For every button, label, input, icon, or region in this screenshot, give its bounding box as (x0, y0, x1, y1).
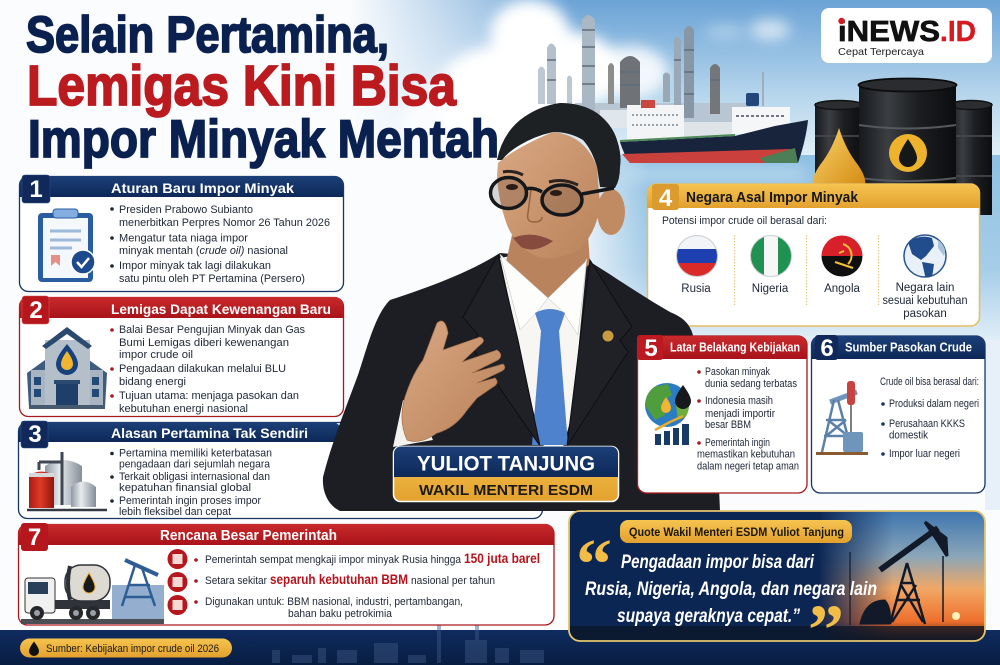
panel 5: latar belakang kebijakan: Indonesia masih (705, 395, 773, 407)
panel 5: latar belakang kebijakan: menjadi importir (705, 408, 775, 420)
suit jacket (323, 253, 720, 511)
panel 7: rencana besar pemerintah: Setara sekitar (205, 575, 267, 587)
panel 4: negara asal impor minyak: Negara lain (896, 282, 954, 294)
icon: globe (904, 235, 946, 280)
title: Impor Minyak Mentah (28, 110, 499, 169)
background scene: sky and sea (330, 0, 1000, 510)
mouth (513, 235, 553, 249)
person: yuliot tanjung (323, 103, 720, 511)
lapels (463, 255, 632, 446)
panel 2: lemigas dapat kewenangan baru: Tujuan utama: menjaga pasokan dan (119, 390, 299, 402)
title: Lemigas Kini Bisa (27, 54, 457, 118)
panel 1: aturan baru impor minyak: Impor minyak tak lagi dilakukan (119, 260, 271, 272)
shirt cuff (393, 400, 433, 447)
panel 1: aturan baru impor minyak: Mengatur tata niaga impor (119, 232, 248, 244)
panel 3: alasan pertamina tak sendiri: kepatuhan finansial global (119, 482, 251, 494)
panel 3: alasan pertamina tak sendiri: Alasan Pertamina Tak Sendiri (111, 425, 308, 441)
panel 2: lemigas dapat kewenangan baru: Balai Besar Pengujian Minyak dan Gas (119, 324, 305, 336)
panel 7: rencana besar pemerintah (18, 523, 554, 625)
panel 7: rencana besar pemerintah: bahan baku petrokimia (288, 608, 393, 620)
panel 1: aturan baru impor minyak: Aturan Baru Impor Minyak (111, 180, 294, 196)
footer bar (0, 622, 1000, 665)
flag: nigeria (750, 235, 792, 277)
opening quote mark: “ (576, 524, 612, 604)
source pill: Sumber: Kebijakan impor crude oil 2026 (46, 643, 219, 655)
panel 2: lemigas dapat kewenangan baru: impor crude oil (119, 349, 193, 361)
logo: iNEWS.ID (821, 8, 992, 63)
panel 7: rencana besar pemerintah: Rencana Besar Pemerintah (160, 527, 337, 544)
quote text: supaya geraknya cepat.” (617, 606, 800, 627)
icon: pumpjack (816, 381, 868, 455)
panel 6: sumber pasokan crude: Perusahaan KKKS (889, 418, 965, 430)
panel 1: aturan baru impor minyak: menerbitkan Perpres Nomor 26 Tahun 2026 (119, 217, 330, 229)
hair (497, 103, 621, 188)
icon: document badge 3 (168, 595, 188, 615)
footer skyline (272, 622, 544, 663)
name badge: YULIOT TANJUNG (417, 452, 595, 476)
eyes and brows (503, 171, 578, 196)
quote label pill (620, 520, 852, 543)
panel 7: rencana besar pemerintah: nasional per tahun (411, 575, 495, 587)
panel 2: lemigas dapat kewenangan baru: Lemigas Dapat Kewenangan Baru (111, 301, 331, 317)
nose (528, 190, 542, 222)
panel 2: lemigas dapat kewenangan baru (19, 296, 344, 416)
logo: iNEWS.ID: .ID (940, 16, 976, 48)
panel 7: rencana besar pemerintah: 150 juta barel (464, 550, 540, 566)
panel 5: latar belakang kebijakan: Pemerintah ingin (705, 437, 770, 449)
panel 6: sumber pasokan crude: 6 (820, 335, 834, 362)
quote text (585, 552, 877, 627)
panel 2: lemigas dapat kewenangan baru: bidang energi (119, 376, 186, 388)
panel 4: negara asal impor minyak: Negara Asal Impor Minyak (686, 189, 859, 206)
panel 3: alasan pertamina tak sendiri: Pemerintah ingin proses impor (119, 495, 261, 507)
lapel pin (602, 330, 614, 342)
panel 5: latar belakang kebijakan: dunia sedang terbatas (705, 378, 797, 390)
neck (506, 235, 590, 298)
panel 4: negara asal impor minyak: Rusia (681, 283, 711, 295)
panel 5: latar belakang kebijakan (637, 335, 807, 493)
icon: tanker truck and pumpjack (21, 560, 164, 624)
icon: document badge 2 (168, 572, 188, 592)
logo: iNEWS.ID: iNEWS (838, 16, 940, 48)
panel 3: alasan pertamina tak sendiri: lebih fleksibel dan cepat (119, 506, 231, 518)
panel 6: sumber pasokan crude: Sumber Pasokan Crude (845, 340, 972, 354)
panel 2: lemigas dapat kewenangan baru: Bumi Lemigas diberi kewenangan (119, 337, 289, 349)
collar (500, 254, 587, 335)
icon: document badge 1 (168, 549, 188, 569)
quote text: Pengadaan impor bisa dari (621, 552, 815, 573)
icon: lemigas building (27, 327, 107, 409)
panel 6: sumber pasokan crude: domestik (889, 430, 928, 442)
panel 5: latar belakang kebijakan: besar BBM (705, 419, 751, 431)
panel 3: alasan pertamina tak sendiri: pengadaan dari sejumlah negara (119, 458, 271, 470)
panel 5: latar belakang kebijakan: Pasokan minyak (705, 366, 770, 378)
icon: storage tanks (27, 452, 107, 510)
panel 4: negara asal impor minyak: sesuai kebutuhan (882, 295, 968, 307)
flag: russia (676, 235, 718, 277)
panel 7: rencana besar pemerintah: separuh kebutuhan BBM (270, 571, 408, 587)
panel 4: negara asal impor minyak: Nigeria (752, 283, 789, 295)
panel 4: negara asal impor minyak: pasokan (903, 308, 947, 320)
panel 3: alasan pertamina tak sendiri: 3 (28, 421, 42, 448)
title (26, 6, 499, 169)
panel 2: lemigas dapat kewenangan baru: 2 (29, 297, 43, 324)
name badge: WAKIL MENTERI ESDM (419, 482, 593, 499)
panel 7: rencana besar pemerintah: Digunakan untuk: BBM nasional, industri, pertambangan, (205, 596, 463, 608)
panel 5: latar belakang kebijakan: dalam negeri tetap aman (697, 460, 799, 472)
panel 5: latar belakang kebijakan: 5 (644, 335, 658, 362)
logo: iNEWS.ID: Cepat Terpercaya (838, 46, 924, 58)
panel 1: aturan baru impor minyak: Presiden Prabowo Subianto (119, 204, 253, 216)
panel 6: sumber pasokan crude (812, 335, 985, 493)
necktie (532, 309, 568, 445)
quote label pill: Quote Wakil Menteri ESDM Yuliot Tanjung (629, 527, 844, 539)
panel 2: lemigas dapat kewenangan baru: kebutuhan energi nasional (119, 403, 248, 415)
name badge (394, 446, 618, 502)
quote text: Rusia, Nigeria, Angola, dan negara lain (585, 579, 877, 600)
icon: clipboard with check (38, 209, 95, 282)
panel 1: aturan baru impor minyak: satu pintu oleh PT Pertamina (Persero) (119, 273, 305, 285)
quote panel (568, 510, 986, 642)
panel 7: rencana besar pemerintah: Pemerintah sempat mengkaji impor minyak Rusia hingga (205, 554, 462, 566)
panel 1: aturan baru impor minyak: minyak mentah (crude oil) nasional (119, 245, 288, 257)
illustration: oil barrels and gold drop (813, 78, 992, 218)
shirt (500, 250, 587, 450)
panel 4: negara asal impor minyak: Potensi impor crude oil berasal dari: (662, 215, 827, 227)
panel 1: aturan baru impor minyak: 1 (29, 176, 43, 203)
panel 1: aturan baru impor minyak (19, 175, 344, 292)
flag: angola (821, 235, 863, 277)
illustration: oil tanker ship (620, 72, 808, 163)
panel 5: latar belakang kebijakan: memastikan kebutuhan (697, 448, 795, 460)
panel 4: negara asal impor minyak: Angola (824, 283, 861, 295)
panel 6: sumber pasokan crude: Produksi dalam negeri (889, 398, 979, 410)
panel 5: latar belakang kebijakan: Latar Belakang Kebijakan (670, 340, 800, 354)
panel 3: alasan pertamina tak sendiri: Terkait obligasi internasional dan (119, 471, 270, 483)
hand (402, 321, 505, 441)
panel 2: lemigas dapat kewenangan baru: Pengadaan dilakukan melalui BLU (119, 363, 286, 375)
illustration: refinery towers (538, 15, 750, 128)
face (497, 132, 600, 258)
panel 7: rencana besar pemerintah: 7 (28, 524, 41, 551)
oil pump silhouette (850, 522, 947, 625)
title: Selain Pertamina, (26, 6, 389, 63)
panel 3: alasan pertamina tak sendiri (18, 421, 542, 518)
panel 4: negara asal impor minyak: 4 (659, 185, 673, 212)
icon: globe, oil drop and growth chart (645, 383, 691, 445)
panel 6: sumber pasokan crude: Impor luar negeri (889, 448, 960, 460)
panel 3: alasan pertamina tak sendiri: Pertamina memiliki keterbatasan (119, 448, 272, 460)
source pill (20, 638, 232, 658)
ear (597, 189, 625, 235)
panel 4: negara asal impor minyak (647, 184, 980, 326)
glasses (490, 178, 614, 215)
